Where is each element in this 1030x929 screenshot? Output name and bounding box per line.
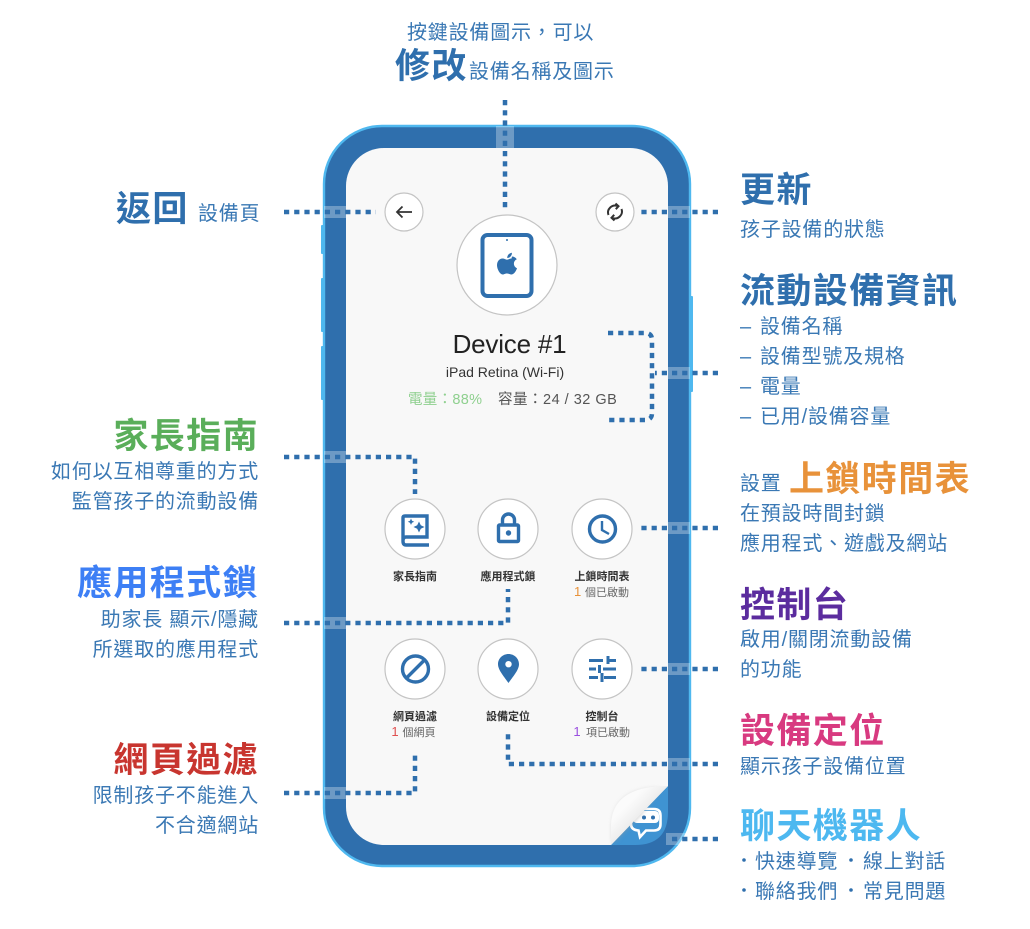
feature: parent guide: 家長指南 bbox=[393, 569, 437, 583]
refresh button bbox=[596, 193, 634, 231]
heading: app lock: 應用程式鎖 bbox=[77, 564, 259, 603]
icon: chat bubble bbox=[631, 809, 660, 837]
heading: device info: 流動設備資訊 bbox=[740, 272, 958, 311]
feature: control panel: 控制台 bbox=[586, 709, 618, 723]
heading: chatbot: 線上對話 bbox=[863, 850, 946, 873]
heading: device info: 設備名稱 bbox=[760, 315, 843, 338]
feature: web filter: 網頁過濾 bbox=[393, 709, 437, 723]
feature: app lock bbox=[478, 499, 538, 583]
heading: app lock bbox=[77, 564, 259, 661]
icon: tablet bbox=[482, 235, 532, 296]
feature: control panel: 項已啟動 bbox=[586, 725, 630, 739]
phone bbox=[321, 126, 693, 866]
icon: sliders bbox=[589, 656, 616, 682]
heading: app lock: 所選取的應用程式 bbox=[93, 637, 259, 661]
page curl bbox=[611, 786, 668, 845]
connector: web filter bbox=[284, 752, 415, 799]
page curl shadow bbox=[613, 789, 660, 843]
connector: app lock bbox=[284, 589, 508, 629]
back button bbox=[385, 193, 423, 231]
heading: parent guide: 家長指南 bbox=[113, 417, 259, 456]
feature: control panel bbox=[572, 639, 632, 739]
connector: chatbot bbox=[666, 833, 718, 845]
icon: padlock bbox=[498, 525, 518, 542]
feature: schedule bbox=[572, 499, 632, 599]
heading: control panel: 控制台 bbox=[740, 586, 849, 625]
icon: pin bbox=[498, 654, 519, 683]
callout: back: 設備頁 bbox=[198, 202, 260, 225]
heading: locate: 設備定位 bbox=[740, 712, 886, 751]
heading: device info: – bbox=[740, 316, 752, 338]
heading: chatbot: 快速導覽 bbox=[755, 850, 838, 873]
heading: edit: 修改 bbox=[395, 47, 468, 86]
feature: parent guide bbox=[385, 499, 445, 583]
icon: apple logo bbox=[497, 253, 517, 274]
heading: control panel bbox=[740, 586, 913, 681]
heading: update bbox=[740, 171, 886, 241]
icon: book bbox=[403, 516, 429, 545]
connector: back bbox=[284, 206, 376, 218]
feature: control panel: 1 bbox=[573, 724, 581, 739]
phone frame bbox=[324, 126, 690, 866]
heading: device info: 已用/設備容量 bbox=[760, 405, 891, 428]
heading: app lock: 助家長 顯示/隱藏 bbox=[101, 608, 259, 631]
icon: clock bbox=[590, 516, 616, 542]
heading: schedule: 應用程式、遊戲及網站 bbox=[740, 531, 948, 555]
connector: refresh bbox=[641, 206, 718, 218]
heading: web filter: 網頁過濾 bbox=[113, 741, 259, 780]
heading: web filter: 限制孩子不能進入 bbox=[93, 784, 259, 807]
feature: locate bbox=[478, 639, 538, 723]
battery and storage: 容量：24 / 32 GB bbox=[498, 391, 617, 408]
connector: edit bbox=[496, 100, 514, 208]
connector: control panel bbox=[637, 663, 718, 675]
connector: schedule bbox=[637, 522, 718, 534]
battery and storage bbox=[408, 391, 617, 408]
heading: schedule: 在預設時間封鎖 bbox=[740, 502, 886, 525]
heading: web filter: 不合適網站 bbox=[155, 814, 259, 837]
heading: update: 更新 bbox=[740, 171, 813, 210]
heading: locate bbox=[740, 712, 906, 778]
device name: Device #1 bbox=[453, 329, 566, 359]
device model: iPad Retina (Wi-Fi) bbox=[446, 364, 564, 380]
heading: schedule: 設置 bbox=[740, 472, 782, 495]
connector: parent guide bbox=[284, 451, 415, 494]
heading: device info: – bbox=[740, 346, 752, 368]
feature: schedule: 1 bbox=[574, 584, 581, 599]
feature: app lock: 應用程式鎖 bbox=[480, 569, 536, 583]
heading: device info: – bbox=[740, 376, 752, 398]
callout: back: 返回 bbox=[116, 190, 189, 229]
chatbot corner bbox=[611, 786, 668, 845]
heading: chatbot bbox=[740, 807, 946, 903]
corner flap bbox=[611, 786, 668, 845]
heading: schedule: 上鎖時間表 bbox=[789, 460, 971, 499]
icon: block bbox=[402, 656, 428, 682]
heading: control panel: 啟用/關閉流動設備 bbox=[740, 628, 913, 651]
connector: device info bbox=[608, 333, 718, 420]
heading: device info: 設備型號及規格 bbox=[760, 345, 906, 368]
feature: web filter: 個網頁 bbox=[402, 725, 436, 739]
heading: update: 孩子設備的狀態 bbox=[740, 218, 886, 241]
icon: back arrow bbox=[397, 206, 412, 218]
heading: edit bbox=[395, 21, 615, 86]
heading: web filter bbox=[93, 741, 259, 837]
device icon circle bbox=[457, 215, 557, 315]
heading: edit: 設備名稱及圖示 bbox=[469, 60, 615, 83]
feature: web filter: 1 bbox=[391, 724, 399, 739]
heading: chatbot: 常見問題 bbox=[863, 880, 946, 903]
heading: chatbot: 聯絡我們 bbox=[755, 880, 838, 903]
heading: device info: – bbox=[740, 406, 752, 428]
heading: locate: 顯示孩子設備位置 bbox=[740, 755, 906, 778]
phone screen bbox=[346, 148, 668, 845]
connector: locate bbox=[508, 730, 718, 770]
heading: parent guide bbox=[51, 417, 259, 513]
heading: device info: 電量 bbox=[760, 376, 802, 398]
heading: edit: 按鍵設備圖示，可以 bbox=[407, 21, 594, 44]
heading: chatbot: 聊天機器人 bbox=[740, 807, 922, 846]
heading: parent guide: 監管孩子的流動設備 bbox=[72, 490, 259, 513]
heading: schedule bbox=[740, 460, 971, 555]
feature: schedule: 個已啟動 bbox=[585, 585, 629, 599]
heading: device info bbox=[740, 272, 958, 428]
callout: back bbox=[116, 190, 260, 229]
phone side buttons bbox=[321, 225, 693, 400]
feature: web filter bbox=[385, 639, 445, 739]
heading: control panel: 的功能 bbox=[740, 658, 802, 681]
heading: parent guide: 如何以互相尊重的方式 bbox=[51, 460, 259, 483]
icon: refresh bbox=[608, 204, 622, 220]
feature: schedule: 上鎖時間表 bbox=[574, 569, 630, 583]
battery and storage: 電量：88% bbox=[408, 392, 482, 408]
feature: locate: 設備定位 bbox=[486, 709, 530, 723]
